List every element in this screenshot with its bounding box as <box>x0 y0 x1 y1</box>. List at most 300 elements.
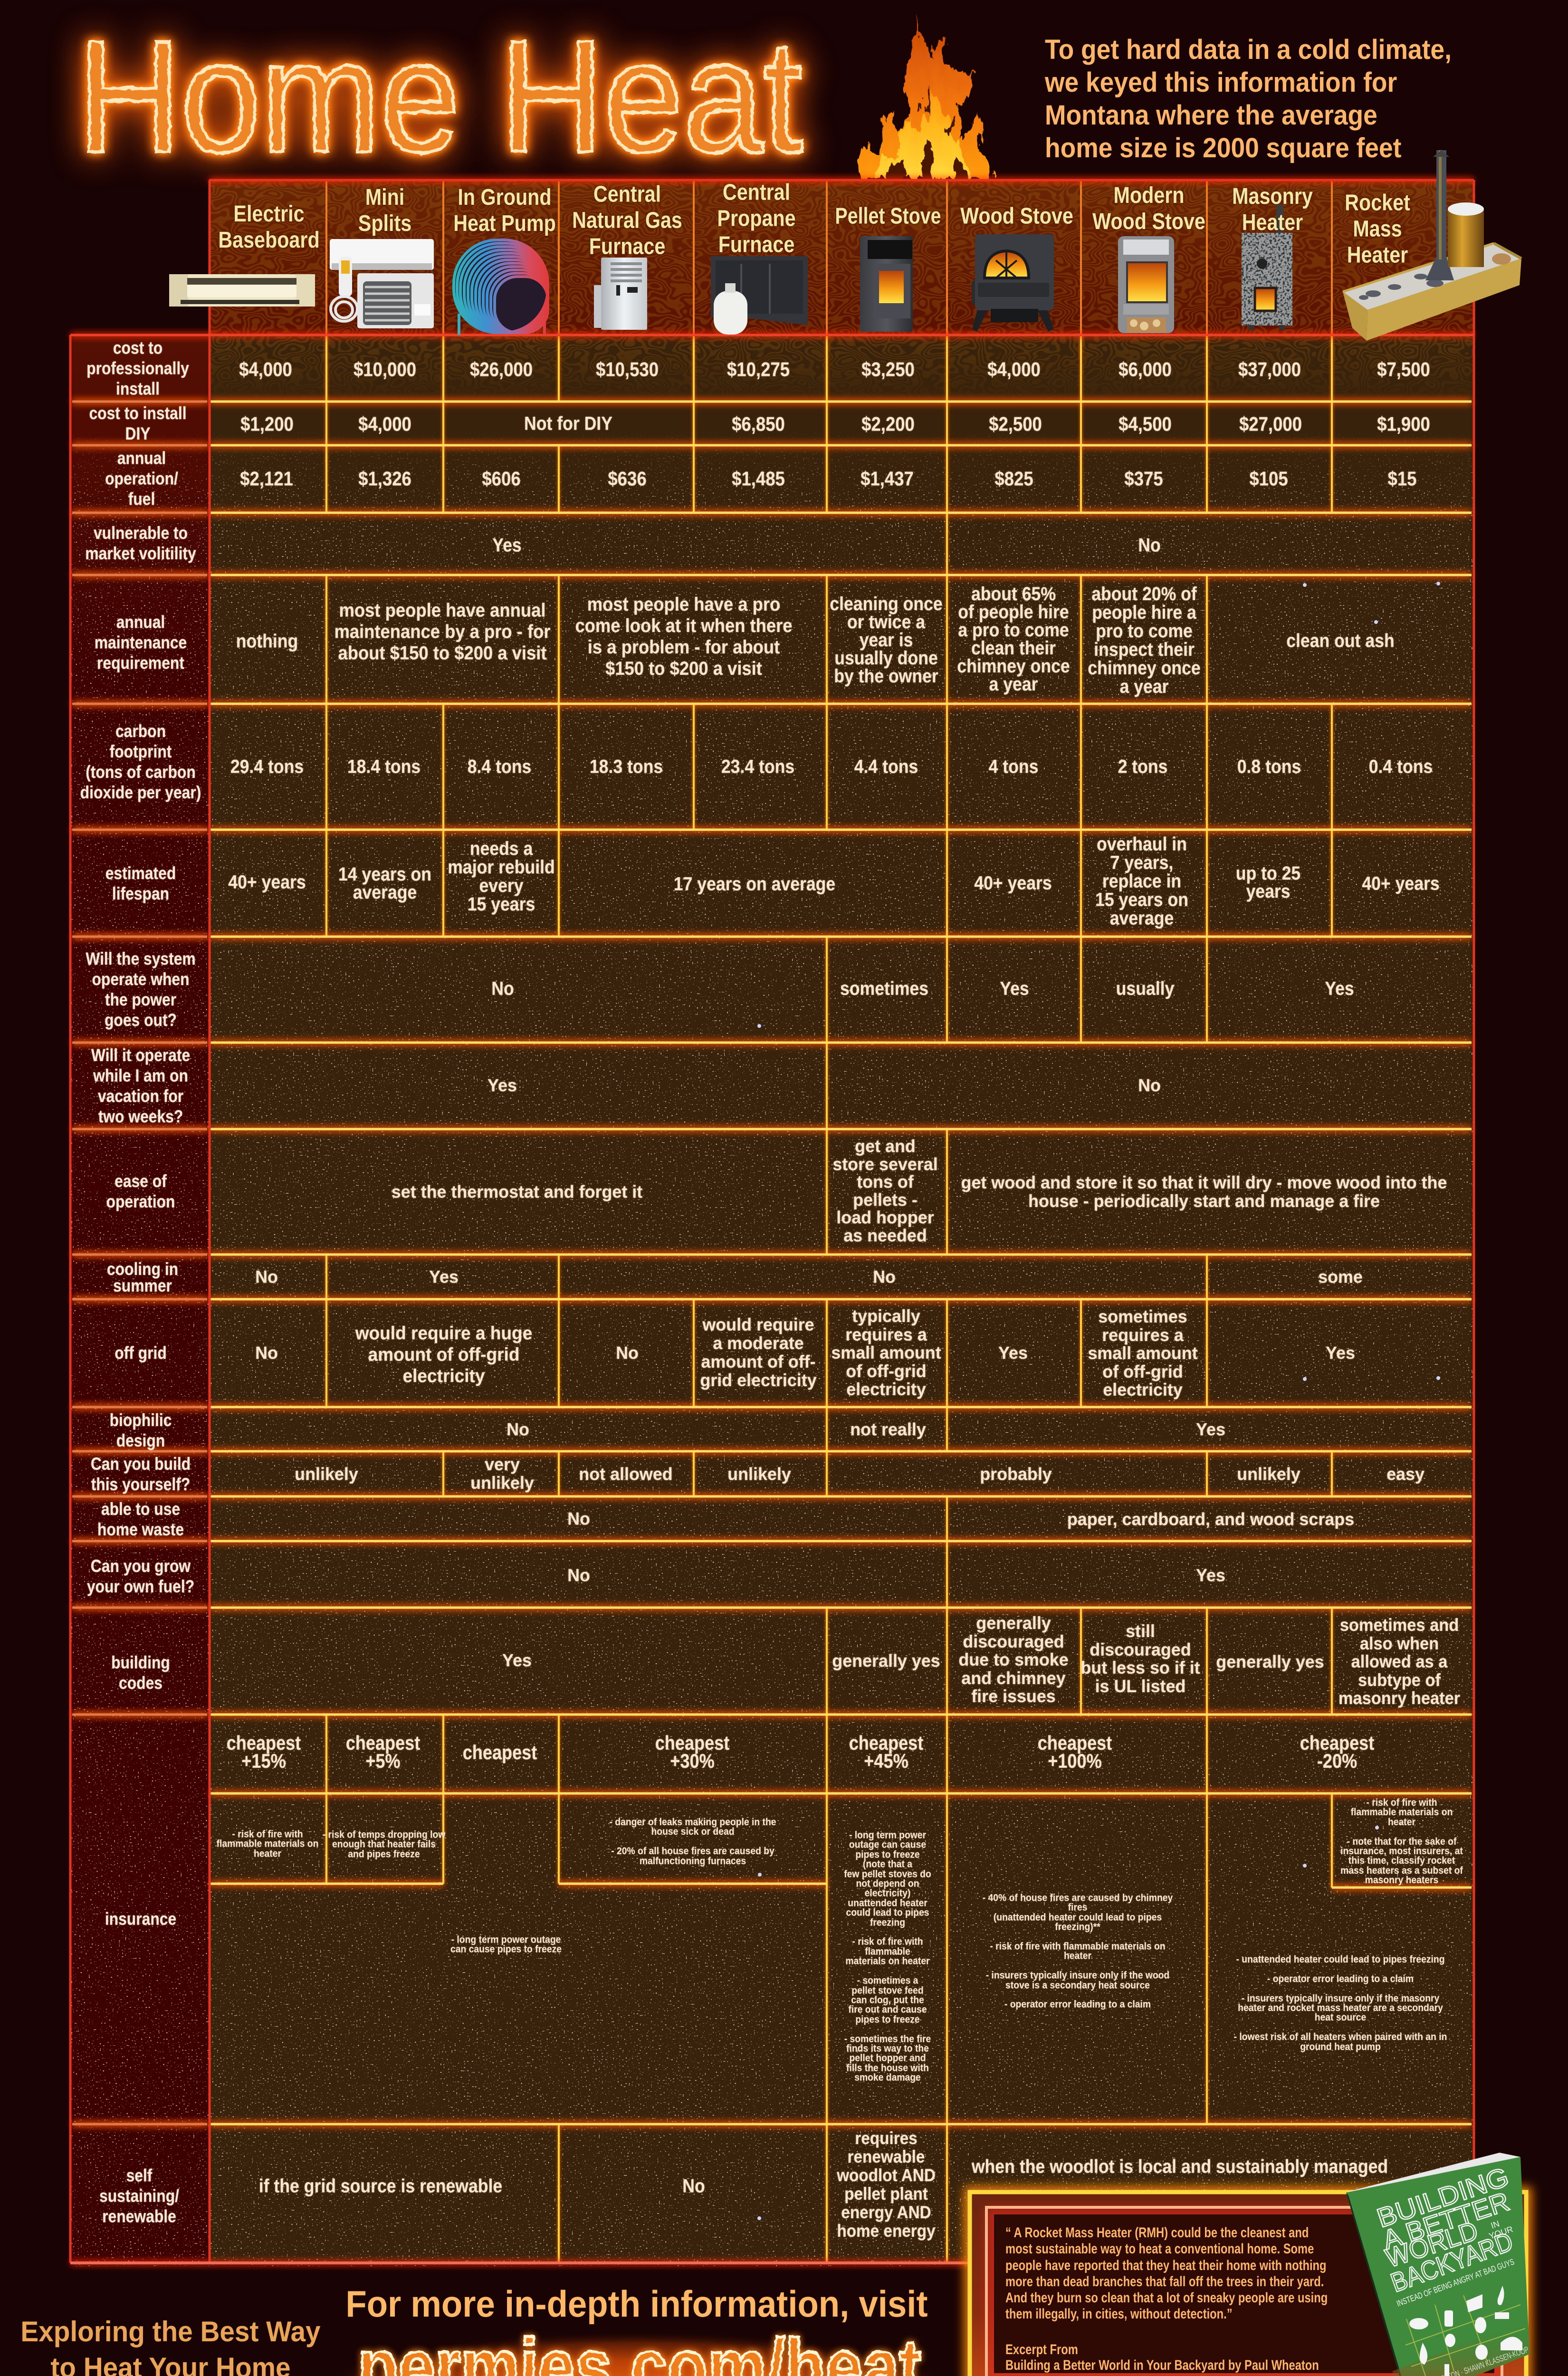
row label: two weeks? <box>98 1107 183 1126</box>
risk note: pellet: unattended heater <box>848 1898 927 1909</box>
value: 40+ years <box>974 872 1052 893</box>
premium: Electric Baseboard: cheapest <box>227 1732 301 1754</box>
value: Mini Splits: $1,326 <box>358 468 411 489</box>
value: but less so if it <box>1080 1658 1200 1677</box>
value: wood stove maintenance: a pro to come <box>958 620 1069 641</box>
premium: Pellet: +45% <box>864 1750 908 1772</box>
value: furnace maintenance <box>575 594 793 680</box>
value: Yes <box>1325 978 1354 999</box>
value: load hopper <box>836 1208 934 1227</box>
table grid lines <box>70 180 1474 2263</box>
row: operate when the power goes out <box>70 937 1474 1043</box>
row label <box>95 612 187 673</box>
value: wood stove maintenance: chimney once <box>957 656 1070 677</box>
value <box>958 1614 1069 1705</box>
premium: furnaces <box>655 1734 729 1770</box>
value: 0.4 tons <box>1369 757 1433 777</box>
value: No <box>507 1420 529 1439</box>
row label: estimated <box>105 863 176 883</box>
risk note: baseboard: heater <box>254 1848 281 1859</box>
value: 15 years on <box>1095 890 1188 910</box>
quote text: rocket mass heater excerpt: And they burn so clean that a lot of sneaky people are using <box>1005 2290 1328 2306</box>
intro note: Montana data: To get hard data in a cold climate, <box>1045 34 1452 65</box>
value: Rocket Mass: $15 <box>1388 468 1416 489</box>
row label: Will the system <box>86 949 196 968</box>
premium: wood stoves: +100% <box>1048 1750 1102 1772</box>
value: unlikely <box>295 1465 358 1484</box>
row label <box>80 721 201 803</box>
value: modern stove maintenance: pro to come <box>1096 621 1193 642</box>
footer call to action: For more in-depth information, visit <box>345 2283 928 2325</box>
row label: renewable <box>102 2207 176 2226</box>
value: Rocket Mass: $1,900 <box>1377 412 1430 435</box>
risk note: rocket mass heater: - risk of fire with <box>1366 1797 1437 1808</box>
column head: Masonry Heater: Masonry <box>1232 184 1313 209</box>
risk note: wood stoves: (unattended heater could lead to pipes <box>994 1912 1162 1923</box>
risk note: mini split: - risk of temps dropping low <box>323 1829 445 1840</box>
book cover: Building a Better World in Your Backyard: BACKYARD <box>1387 2226 1517 2298</box>
value: set the thermostat and forget it <box>392 1182 642 1201</box>
premium: Pellet <box>849 1734 923 1770</box>
quote text: rocket mass heater excerpt: them illegally, in cities, without detection.” <box>1005 2307 1233 2322</box>
value: when the woodlot is local and sustainably managed <box>972 2156 1388 2177</box>
value <box>1080 1622 1200 1696</box>
risk note: baseboard: - risk of fire with <box>232 1829 303 1839</box>
value: No <box>255 1267 278 1287</box>
column head: In Ground Heat Pump: Heat Pump <box>453 211 556 236</box>
value: years <box>1246 881 1291 902</box>
premium: Mini Splits: +5% <box>365 1750 401 1772</box>
risk note: pellet: finds its way to the <box>846 2043 929 2054</box>
photo: rocket mass heater <box>1343 150 1521 341</box>
column head: Central Propane Furnace: Furnace <box>718 232 794 258</box>
row label: market volitility <box>85 544 196 563</box>
book cover: Building a Better World in Your Backyard: WORLD <box>1382 2215 1482 2273</box>
row label <box>105 448 178 509</box>
value: some <box>1318 1267 1363 1287</box>
value: modern stove maintenance <box>1088 585 1201 696</box>
value: Yes <box>1326 1343 1355 1363</box>
risk note: power outage <box>450 1935 562 1954</box>
row label: cost to install <box>89 403 187 423</box>
risk note: furnaces: - danger of leaks making people in the <box>609 1817 776 1828</box>
value: would require <box>702 1315 814 1334</box>
value: sometimes and <box>1340 1615 1459 1635</box>
risk note: pellet: freezing <box>870 1917 905 1928</box>
row label: Can you grow <box>91 1556 191 1576</box>
premium: Electric Baseboard <box>227 1734 301 1770</box>
column head: Central Natural Gas Furnace: Central <box>593 182 661 207</box>
value: pellet maintenance: usually done <box>834 648 938 669</box>
value: clean out ash: clean out ash <box>1286 630 1395 651</box>
book cover: Building a Better World in Your Backyard <box>1346 2153 1530 2376</box>
risk note: pellet: - long term power <box>849 1830 926 1841</box>
value: allowed as a <box>1351 1652 1447 1671</box>
risk note: furnaces: malfunctioning furnaces <box>640 1856 746 1867</box>
value: modern stove maintenance: a year <box>1120 676 1168 697</box>
row label: operation <box>106 1192 175 1211</box>
value: overhaul in <box>1097 834 1187 854</box>
intro note: Montana data <box>1045 33 1452 164</box>
value: Yes <box>998 1343 1028 1363</box>
value: Yes: Yes <box>492 535 522 556</box>
value: 23.4 tons <box>721 757 794 777</box>
column head: Mini Splits <box>358 184 411 237</box>
row: operate while on vacation <box>70 1043 1474 1129</box>
row label: self <box>126 2166 152 2185</box>
value: Pellet: $1,437 <box>860 468 914 489</box>
value: Propane: $10,275 <box>727 358 790 380</box>
row: can you grow your own fuel <box>70 1541 1474 1608</box>
value: average <box>1110 908 1174 929</box>
row label <box>85 523 196 564</box>
row: cooling in summer <box>70 1255 1474 1299</box>
column head: Central Propane Furnace: Central <box>723 180 790 205</box>
value: Wood Stove: $2,500 <box>989 412 1042 435</box>
row: cost to install DIY <box>70 402 1474 445</box>
column head: Central Propane Furnace: Propane <box>717 206 796 231</box>
quote text: rocket mass heater excerpt <box>1005 2225 1328 2323</box>
risk note: furnaces <box>609 1818 776 1866</box>
risk note: wood stoves <box>983 1894 1173 2010</box>
risk note: pellet: not depend on <box>856 1878 919 1889</box>
row label <box>89 403 187 444</box>
value: Propane: $1,485 <box>732 468 785 489</box>
row: insurance <box>70 1715 1474 2124</box>
value <box>338 865 431 901</box>
value: 14 years on <box>338 864 431 885</box>
value: easy <box>1386 1465 1425 1484</box>
risk note: masonry and rocket: - lowest risk of all heaters when paired with an in <box>1234 2031 1447 2042</box>
row label: off grid <box>115 1343 167 1363</box>
value: 4 tons <box>989 757 1038 777</box>
value <box>1095 835 1188 928</box>
value: 40+ years <box>1362 873 1440 894</box>
intro note: Montana data: we keyed this information for <box>1045 67 1397 98</box>
value: No <box>255 1343 278 1363</box>
risk note: wood stoves: - insurers typically insure only if the wood <box>986 1970 1169 1981</box>
value <box>1339 1616 1460 1707</box>
value: energy AND <box>841 2203 931 2222</box>
value: renewable <box>848 2147 925 2166</box>
value: Yes <box>488 1076 517 1095</box>
value <box>831 1307 941 1399</box>
value: get and <box>855 1137 916 1156</box>
value: average <box>353 882 417 903</box>
value: No <box>873 1267 896 1287</box>
column head: Electric Baseboard: Electric <box>233 201 305 227</box>
value: grid electricity <box>700 1370 817 1390</box>
risk note: wood stoves: heater <box>1064 1951 1091 1962</box>
book cover: Building a Better World in Your Backyard: A BETTER <box>1379 2186 1513 2255</box>
value: Modern Wood Stove: $6,000 <box>1119 358 1172 380</box>
risk note: pellet <box>844 1831 931 2083</box>
value <box>832 1138 938 1244</box>
book cover: Building a Better World in Your Backyard: INSTEAD OF BEING ANGRY AT BAD GUYS <box>1396 2257 1516 2309</box>
value: Yes <box>1196 1565 1225 1585</box>
row: off grid <box>70 1299 1474 1407</box>
photo: in ground heat pump coil <box>454 240 548 335</box>
row label: able to use <box>101 1499 180 1519</box>
value: not allowed <box>579 1465 673 1484</box>
value: discouraged <box>1090 1639 1191 1659</box>
value: No <box>1138 1076 1161 1095</box>
value: Natural Gas: $10,530 <box>596 358 659 380</box>
value: wood stove maintenance: about 65% <box>971 584 1056 604</box>
value: No: No <box>1138 535 1161 556</box>
value: also when <box>1360 1633 1439 1653</box>
row label: lifespan <box>112 884 169 903</box>
risk note: rocket mass heater: masonry heaters <box>1365 1875 1438 1886</box>
value: Pellet: $3,250 <box>861 358 915 380</box>
value: Masonry: $37,000 <box>1238 358 1301 380</box>
risk note: furnaces: house sick or dead <box>651 1826 735 1837</box>
value: Not for DIY: Not for DIY <box>524 413 612 434</box>
value: and chimney <box>961 1668 1066 1687</box>
value: Rocket Mass: $7,500 <box>1377 358 1430 380</box>
risk note: mini split: enough that heater fails <box>332 1839 436 1850</box>
row label: annual <box>117 449 166 468</box>
risk note: rocket mass heater: flammable materials on <box>1351 1807 1453 1818</box>
row label: cooling in <box>107 1259 178 1279</box>
value: electricity <box>402 1366 485 1387</box>
column head: Modern Wood Stove: Modern <box>1113 183 1185 208</box>
value: 0.8 tons <box>1237 757 1301 777</box>
value: every <box>479 875 524 896</box>
risk note: masonry and rocket: - insurers typically insure only if the masonry <box>1242 1993 1439 2004</box>
value: In Ground Heat Pump: $26,000 <box>470 358 533 380</box>
column head: Rocket Mass Heater: Mass <box>1353 217 1402 241</box>
header row: heating systems <box>70 180 1474 335</box>
quote source <box>1005 2342 1319 2373</box>
risk note: masonry and rocket: heat source <box>1315 2012 1366 2023</box>
risk note: wood stoves: fires <box>1068 1902 1087 1913</box>
value: 15 years <box>468 894 535 915</box>
value: wood stove maintenance: of people hire <box>958 602 1069 623</box>
column head: Electric Baseboard: Baseboard <box>218 228 320 253</box>
row label: your own fuel? <box>87 1577 194 1596</box>
value: get wood and store it so that it will dry - move wood into the <box>961 1173 1447 1192</box>
row label: professionally <box>86 358 189 378</box>
value: 18.3 tons <box>590 757 663 777</box>
row: building codes <box>70 1608 1474 1715</box>
row label: the power <box>105 990 176 1009</box>
risk note: rocket mass heater: - note that for the sake of <box>1347 1836 1456 1847</box>
value <box>961 1173 1447 1210</box>
premium: masonry and rocket <box>1300 1734 1374 1770</box>
column head: Wood Stove: Wood Stove <box>960 203 1073 229</box>
risk note: masonry and rocket: - unattended heater could lead to pipes freezing <box>1236 1954 1445 1965</box>
row label: vacation for <box>98 1086 183 1106</box>
risk note: pellet: could lead to pipes <box>846 1907 929 1918</box>
column head: Mini Splits: Splits <box>358 211 411 236</box>
row: vulnerable to market volitility <box>70 513 1474 575</box>
row label: this yourself? <box>91 1475 190 1494</box>
quote source: Building a Better World in Your Backyard by Paul Wheaton <box>1005 2357 1319 2373</box>
value: In Ground: $606 <box>482 468 521 489</box>
row label <box>86 337 189 399</box>
value: electricity <box>846 1380 926 1399</box>
book cover: Building a Better World in Your Backyard: IN <box>1490 2219 1501 2231</box>
row: self sustaining / renewable <box>70 2124 1474 2263</box>
value: furnace maintenance: come look at it when there <box>575 615 793 636</box>
risk note: wood stoves: - 40% of house fires are caused by chimney <box>983 1893 1173 1904</box>
row label <box>106 1171 175 1212</box>
value: furnace maintenance: is a problem - for about <box>588 637 780 658</box>
book cover: Building a Better World in Your Backyard: BUILDING <box>1373 2161 1512 2233</box>
value: house - periodically start and manage a fire <box>1028 1191 1380 1211</box>
risk note: pellet: (note that a <box>863 1859 912 1870</box>
row label <box>99 2165 179 2227</box>
row: biophilic design <box>70 1407 1474 1451</box>
value: Yes <box>429 1267 459 1287</box>
value <box>1088 1308 1198 1399</box>
risk note: pellet: pipes to freeze <box>855 1849 920 1860</box>
value: modern stove maintenance: inspect their <box>1094 639 1195 660</box>
value: replace in <box>1102 871 1181 891</box>
value: of off-grid <box>1102 1361 1183 1381</box>
value: 4.4 tons <box>854 757 918 777</box>
row label: vulnerable to <box>94 523 188 543</box>
risk note: mini split: and pipes freeze <box>348 1849 420 1859</box>
photo: central propane furnace and tank <box>711 256 808 335</box>
row label: carbon <box>115 721 166 741</box>
row label: annual <box>116 612 165 632</box>
column head: Central Natural Gas Furnace: Furnace <box>589 234 665 259</box>
row label <box>107 1261 178 1294</box>
risk note: rocket mass heater: insurance, most insurers, at <box>1340 1846 1463 1857</box>
value: 18.4 tons <box>347 757 421 777</box>
value: 2 tons <box>1118 757 1167 777</box>
value: fire issues <box>971 1686 1056 1706</box>
row label: footprint <box>110 742 172 761</box>
row label: sustaining/ <box>99 2186 179 2206</box>
risk note: pellet: materials on heater <box>845 1956 930 1967</box>
photo: mini split units <box>330 239 434 328</box>
value: electricity <box>1103 1380 1183 1399</box>
value: usually <box>1116 978 1174 999</box>
value: pellet maintenance: cleaning once <box>830 594 943 614</box>
value: furnace maintenance: $150 to $200 a visit <box>605 658 762 679</box>
row label: Can you build <box>91 1454 191 1474</box>
value <box>837 2129 936 2240</box>
row label: requirement <box>97 653 184 673</box>
value: Electric Baseboard: $4,000 <box>239 358 292 380</box>
panel: comparison table <box>70 180 1474 2264</box>
value: wood stove maintenance: clean their <box>971 638 1056 659</box>
column head: Central Natural Gas Furnace: Natural Gas <box>572 208 682 233</box>
value: Modern: $375 <box>1124 468 1163 489</box>
value: No <box>567 1565 590 1585</box>
row: carbon footprint <box>70 704 1474 830</box>
value: modern stove maintenance: chimney once <box>1088 658 1201 679</box>
value: pellet maintenance: year is <box>860 630 913 651</box>
column head: Electric Baseboard <box>218 201 320 253</box>
photo: electric baseboard heater <box>169 274 315 307</box>
row label: home waste <box>97 1520 184 1539</box>
risk note: masonry and rocket: - operator error leading to a claim <box>1267 1974 1414 1984</box>
row label: codes <box>119 1673 163 1693</box>
risk note: power outage: can cause pipes to freeze <box>450 1944 562 1955</box>
value: Pellet: $2,200 <box>861 412 915 435</box>
row label: ease of <box>115 1171 167 1191</box>
row label: DIY <box>125 424 151 443</box>
premium: furnaces: +30% <box>670 1750 715 1772</box>
value: discouraged <box>963 1631 1064 1651</box>
value: wood stove maintenance: a year <box>989 674 1038 695</box>
row label <box>87 1556 194 1597</box>
value: pellet maintenance <box>830 595 943 685</box>
value: not really <box>850 1420 926 1439</box>
value: a moderate <box>713 1333 804 1353</box>
quote text: rocket mass heater excerpt: most sustainable way to heat a conventional home. Some <box>1005 2241 1314 2257</box>
value: Modern: $4,500 <box>1119 412 1172 435</box>
row: ease of operation <box>70 1129 1474 1255</box>
row label: Will it operate <box>91 1045 190 1065</box>
value: 8.4 tons <box>468 757 531 777</box>
value: requires <box>855 2128 918 2148</box>
risk note: masonry and rocket <box>1234 1955 1447 2052</box>
row label <box>91 1454 191 1495</box>
intro note: Montana data: Montana where the average <box>1045 100 1377 131</box>
footer tagline <box>20 2314 321 2376</box>
value <box>700 1315 817 1389</box>
value: small amount <box>831 1343 941 1362</box>
value: 40+ years <box>228 872 306 892</box>
value: No <box>491 978 514 999</box>
risk note: wood stoves: freezing)** <box>1055 1922 1100 1933</box>
value: needs a <box>470 838 533 859</box>
risk note: baseboard: flammable materials on <box>217 1839 318 1849</box>
risk note: rocket mass heater: mass heaters as a subset of <box>1340 1865 1463 1876</box>
value: is UL listed <box>1095 1677 1186 1696</box>
row label: fuel <box>128 489 155 508</box>
risk note: furnaces: - 20% of all house fires are caused by <box>611 1846 774 1857</box>
row: can you build this yourself <box>70 1451 1474 1496</box>
column head: In Ground Heat Pump <box>453 184 556 237</box>
photo: pellet stove <box>860 236 913 332</box>
intro note: Montana data: home size is 2000 square feet <box>1045 133 1401 163</box>
value: mini split and heat pump maintenance <box>334 600 551 664</box>
row label: dioxide per year) <box>80 783 201 802</box>
value <box>470 1455 534 1492</box>
column head: Rocket Mass Heater: Heater <box>1347 242 1408 268</box>
quote text: rocket mass heater excerpt: more than dead branches that fall off the trees in their yard. <box>1005 2274 1324 2290</box>
row label: install <box>116 379 160 398</box>
value: requires a <box>1102 1325 1184 1344</box>
photo: modern wood stove <box>1118 236 1174 333</box>
premium: Electric Baseboard: +15% <box>241 1750 286 1772</box>
value: due to smoke <box>958 1650 1069 1669</box>
risk note: pellet: electricity) <box>865 1888 910 1899</box>
value: pellet plant <box>844 2184 928 2204</box>
row label: cost to <box>113 338 163 357</box>
value: 17 years on average <box>674 873 835 894</box>
panel: quote box frame <box>970 2192 1526 2376</box>
premium: wood stoves <box>1038 1734 1112 1770</box>
value: nothing: nothing <box>236 631 298 652</box>
value: store several <box>832 1154 938 1174</box>
value: pellets - <box>853 1190 918 1209</box>
column head: Rocket Mass Heater <box>1345 190 1410 268</box>
value: 7 years, <box>1110 853 1173 873</box>
row label <box>97 1499 184 1540</box>
value: Yes <box>502 1651 532 1670</box>
value: Yes <box>1000 978 1029 999</box>
value: amount of off- <box>701 1352 816 1371</box>
premium: In Ground Heat Pump: cheapest <box>463 1741 537 1763</box>
value: unlikely <box>727 1465 791 1484</box>
